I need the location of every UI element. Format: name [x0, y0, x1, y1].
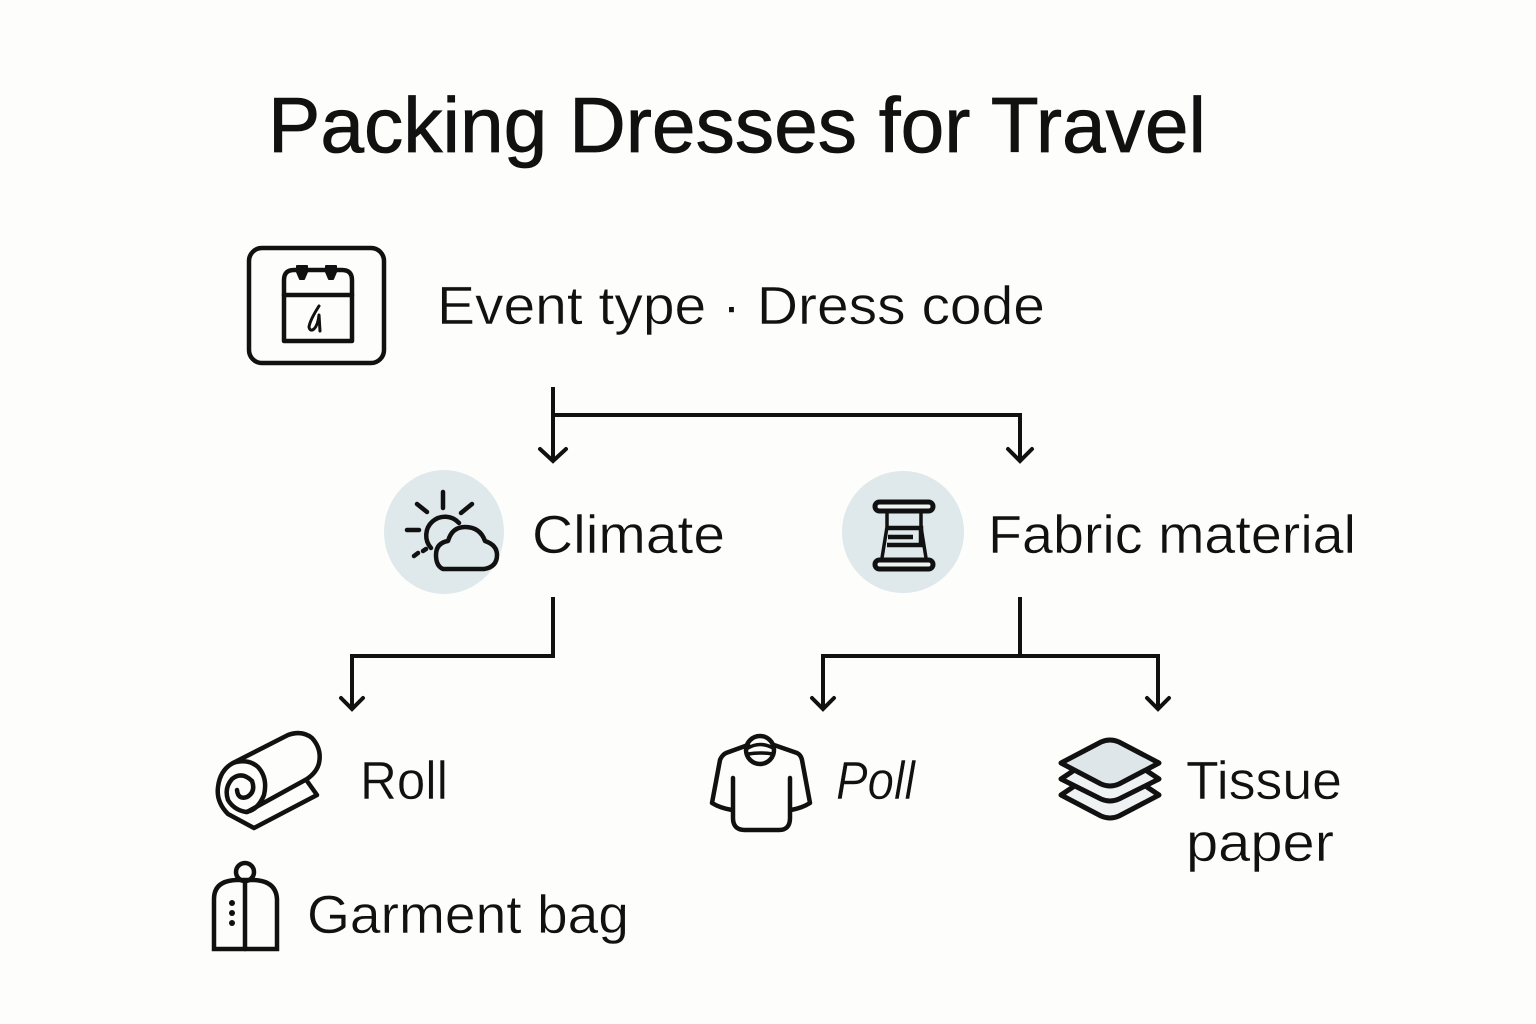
text: event type and dress code: Event type · Dress code — [437, 276, 1045, 336]
icon: t-shirt — [712, 736, 810, 830]
icon: stacked tissue paper — [1061, 740, 1159, 818]
label: garment bag: Garment bag — [307, 885, 629, 945]
title: Packing Dresses for Travel — [268, 81, 1206, 169]
label: tissue paper — [1186, 751, 1342, 873]
icon: garment bag — [214, 863, 277, 949]
label: poll: Poll — [836, 751, 917, 811]
icon: rolled fabric — [218, 733, 320, 828]
label: climate: Climate — [532, 505, 725, 565]
label: fabric material: Fabric material — [988, 505, 1356, 565]
icon: fabric spool — [842, 471, 964, 593]
arrow: climate to roll — [341, 599, 553, 709]
label: tissue paper: Tissue — [1186, 751, 1342, 811]
label: roll: Roll — [360, 751, 448, 811]
icon: climate sun and cloud — [384, 470, 504, 594]
icon: calendar in rounded box — [249, 248, 384, 363]
arrow: event to climate and fabric — [540, 389, 1032, 461]
arrow: fabric to poll and tissue paper — [812, 599, 1169, 709]
label: tissue paper: paper — [1186, 813, 1334, 873]
